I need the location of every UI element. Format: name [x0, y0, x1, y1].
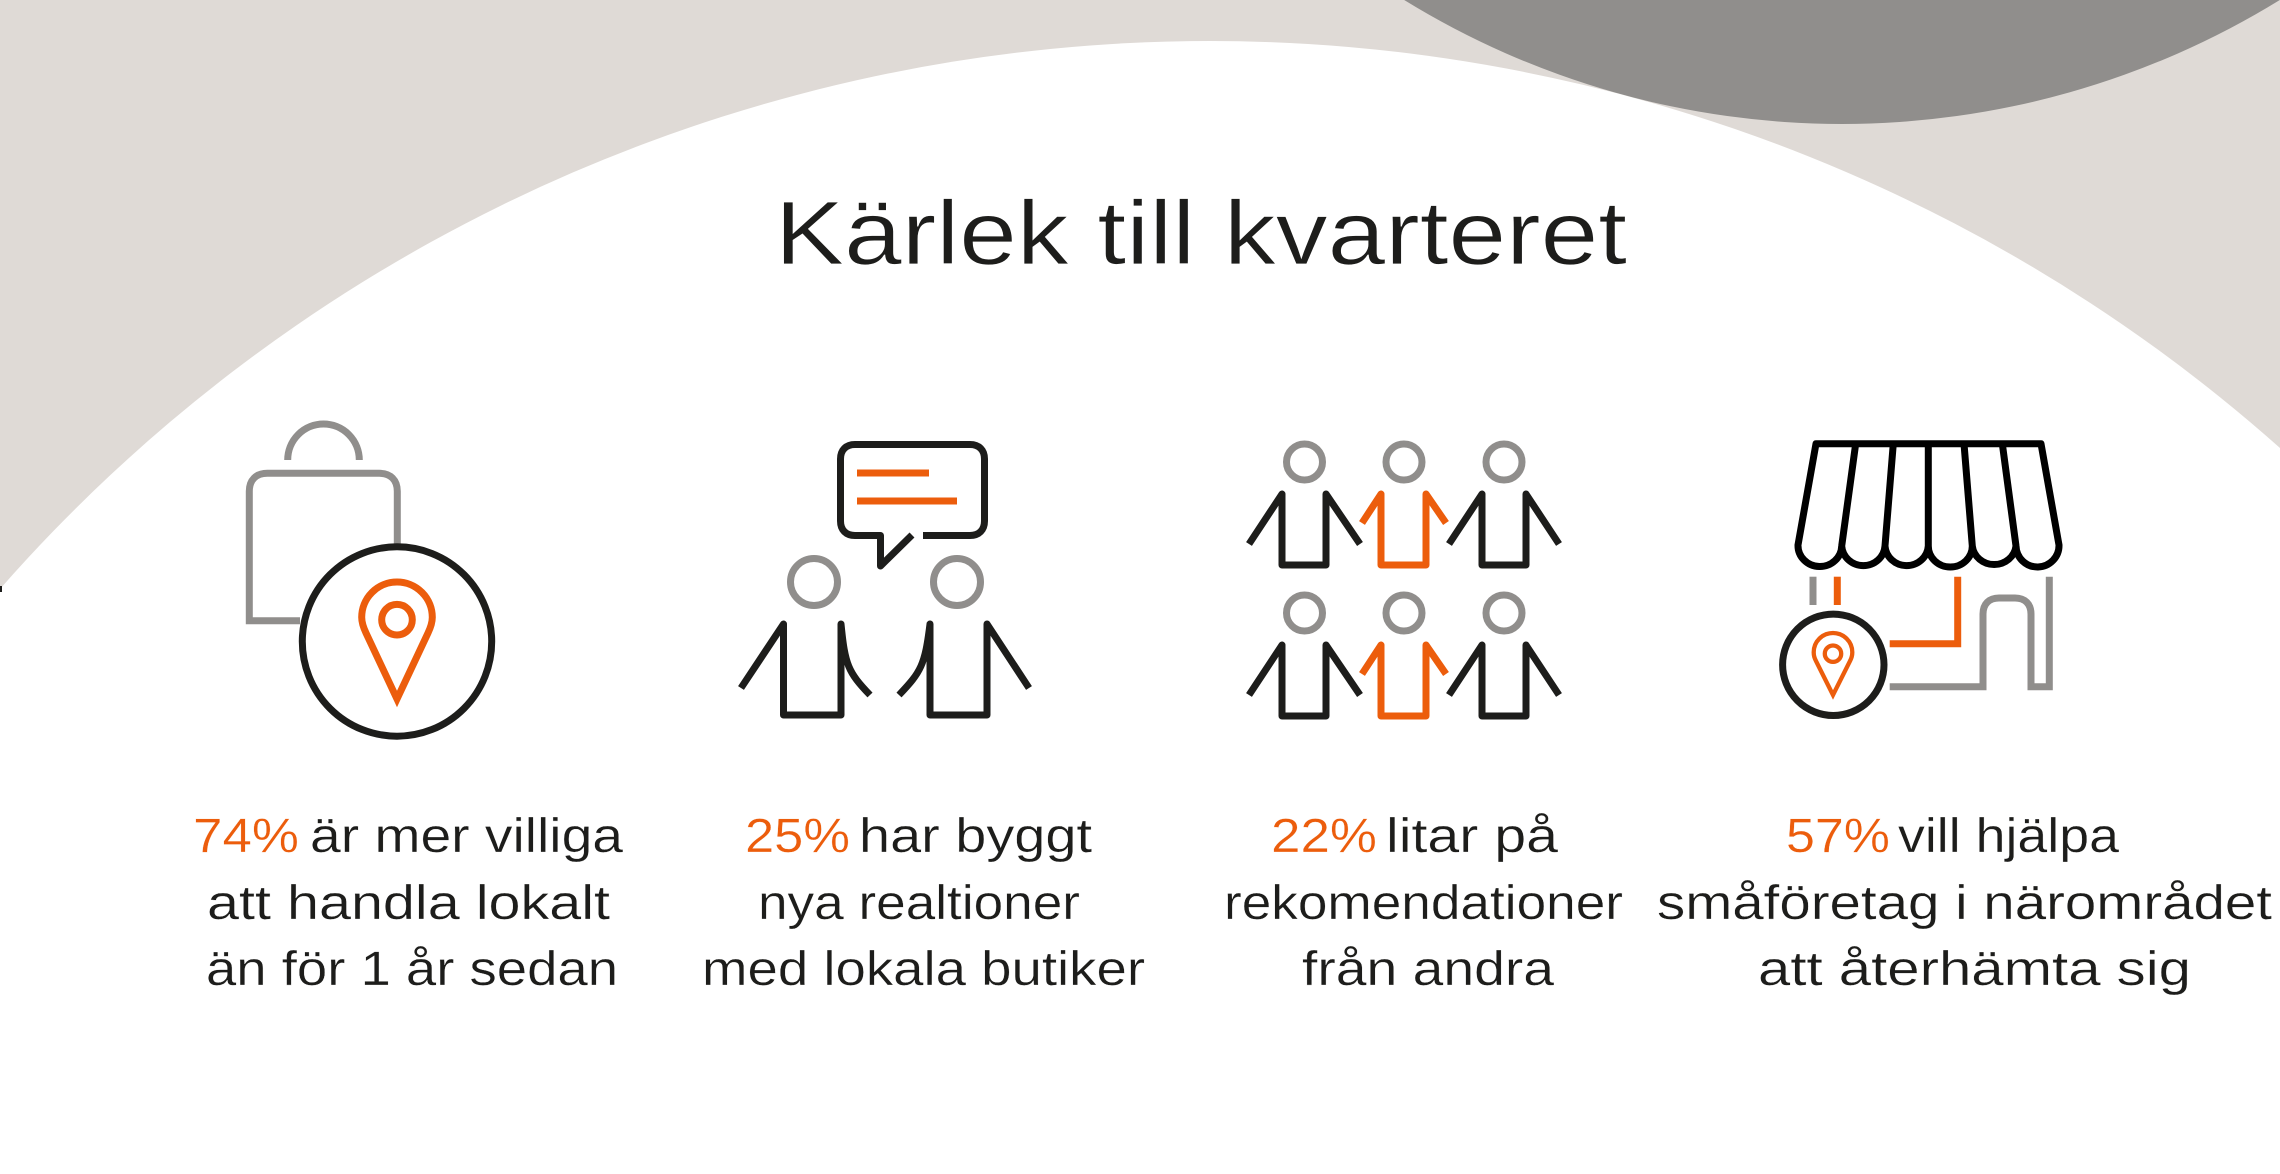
edge mark: [0, 586, 2, 592]
text: 74% statistic: 74%: [193, 810, 299, 863]
text: 57% statistic: vill hjälpa: [1898, 810, 2119, 863]
panel: 57% small businesses: [1657, 444, 2272, 996]
text: 57% statistic: att återhämta sig: [1758, 943, 2191, 996]
panel: 74% shopping: [193, 424, 623, 996]
icon: group of six people: [1249, 444, 1559, 716]
text: 57% statistic: småföretag i närområdet: [1657, 877, 2272, 930]
text: 74% statistic: är mer villiga: [310, 810, 623, 863]
text: 25% statistic: nya realtioner: [758, 877, 1080, 930]
text: 57% statistic: [1657, 810, 2272, 996]
text: 22% statistic: 22%: [1271, 810, 1377, 863]
text: 22% statistic: från andra: [1302, 943, 1554, 996]
text: 22% statistic: [1224, 810, 1623, 996]
panel: 25% relations: [702, 444, 1145, 996]
text: 57% statistic: 57%: [1786, 810, 1890, 863]
text: 74% statistic: än för 1 år sedan: [206, 943, 618, 996]
text: 25% statistic: med lokala butiker: [702, 943, 1145, 996]
title: Kärlek till kvarteret: [775, 184, 1627, 284]
text: 22% statistic: litar på: [1386, 810, 1558, 863]
text: 25% statistic: 25%: [745, 810, 850, 863]
text: 22% statistic: rekomendationer: [1224, 877, 1623, 930]
icon: storefront with location pin: [1783, 444, 2059, 716]
text: 74% statistic: [193, 810, 623, 996]
background: beige band: [0, 0, 2280, 600]
text: 25% statistic: [702, 810, 1145, 996]
icon: shopping bag with location pin: [249, 424, 492, 736]
text: 74% statistic: att handla lokalt: [207, 877, 610, 930]
icon: two people talking: [741, 444, 1029, 715]
background: dark grey circle: [1404, 0, 2280, 124]
panel: 22% recommendations: [1224, 444, 1623, 996]
text: 25% statistic: har byggt: [859, 810, 1092, 863]
